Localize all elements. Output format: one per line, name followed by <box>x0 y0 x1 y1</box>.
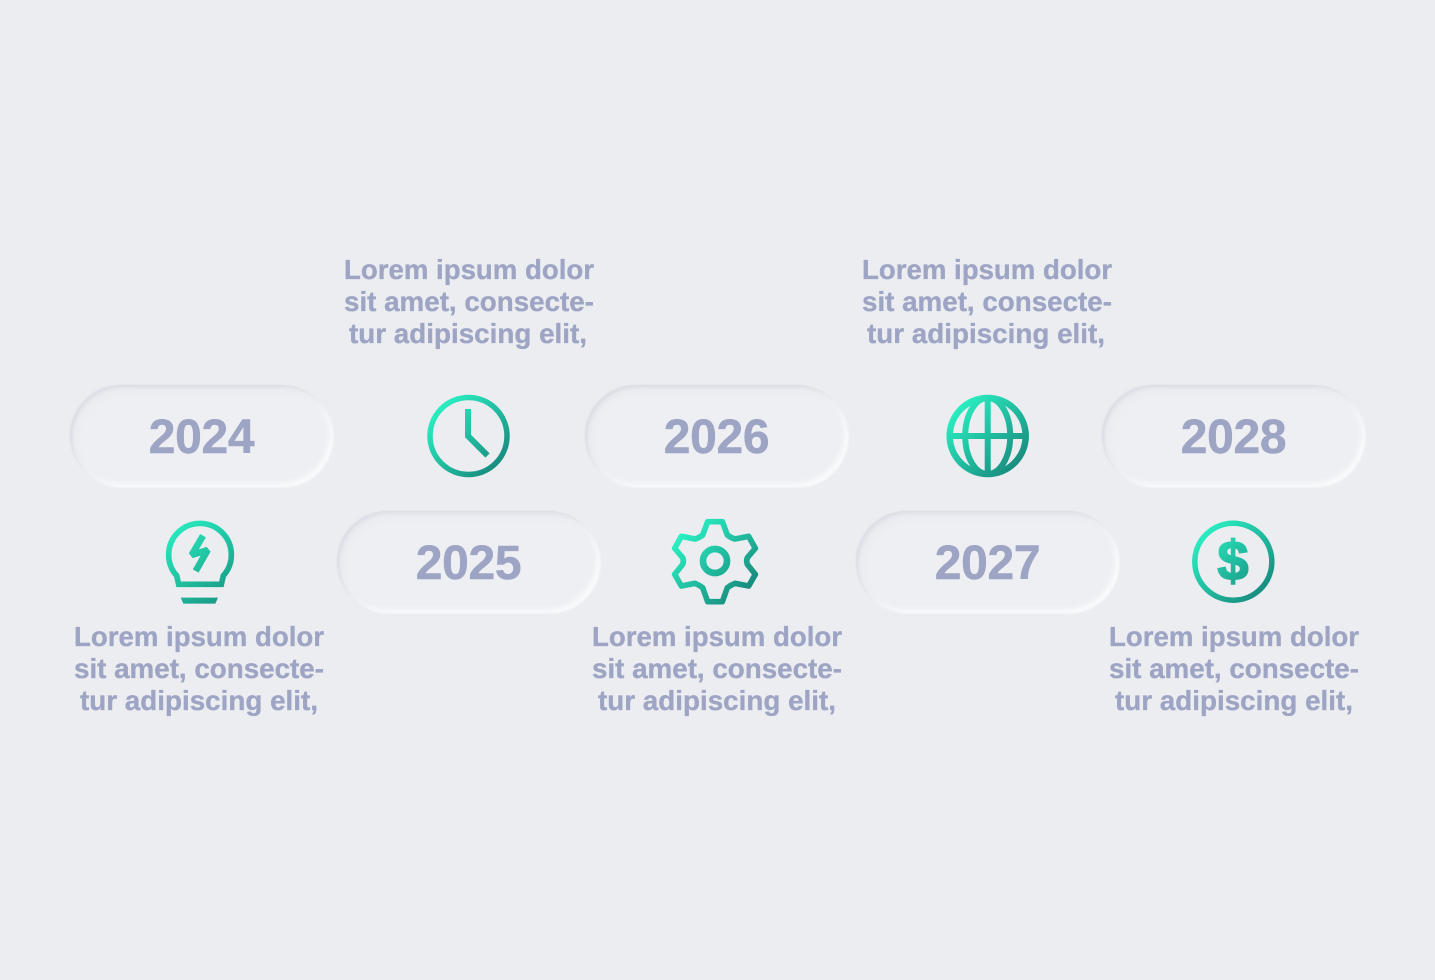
pill: 2025: 2025 <box>416 537 521 590</box>
pill: 2024 <box>70 385 333 487</box>
pill: 2026 <box>585 385 848 487</box>
pill: 2027: 2027 <box>935 537 1040 590</box>
text block: 2025 description: tur adipiscing elit, <box>349 318 587 349</box>
text block: 2028 description <box>1109 621 1359 716</box>
text block: 2025 description <box>344 254 594 349</box>
pill: 2025 <box>337 511 600 613</box>
text block: 2026 description: tur adipiscing elit, <box>598 685 836 716</box>
pill: 2024: 2024 <box>149 411 254 464</box>
text block: 2028 description: Lorem ipsum dolor <box>1109 621 1359 652</box>
text block: 2024 description: Lorem ipsum dolor <box>74 621 324 652</box>
text block: 2026 description: Lorem ipsum dolor <box>592 621 842 652</box>
text block: 2024 description <box>74 621 324 716</box>
pill: 2026: 2026 <box>664 411 769 464</box>
text block: 2027 description: sit amet, consecte- <box>862 286 1112 317</box>
text block: 2024 description: sit amet, consecte- <box>74 653 324 684</box>
text block: 2025 description: sit amet, consecte- <box>344 286 594 317</box>
icon: clock <box>430 398 507 474</box>
icon: gear <box>675 522 755 602</box>
pill: 2028: 2028 <box>1181 411 1286 464</box>
icon: dollar coin: $ <box>1217 529 1249 592</box>
text block: 2025 description: Lorem ipsum dolor <box>344 254 594 285</box>
text block: 2027 description: Lorem ipsum dolor <box>862 254 1112 285</box>
text block: 2028 description: sit amet, consecte- <box>1109 653 1359 684</box>
icon: dollar coin <box>1195 523 1272 600</box>
text block: 2028 description: tur adipiscing elit, <box>1115 685 1353 716</box>
icon: light bulb <box>169 523 231 604</box>
pill: 2027 <box>856 511 1119 613</box>
text block: 2026 description <box>592 621 842 716</box>
icon: globe <box>950 398 1026 474</box>
text block: 2026 description: sit amet, consecte- <box>592 653 842 684</box>
text block: 2027 description: tur adipiscing elit, <box>867 318 1105 349</box>
text block: 2024 description: tur adipiscing elit, <box>80 685 318 716</box>
text block: 2027 description <box>862 254 1112 349</box>
pill: 2028 <box>1102 385 1365 487</box>
